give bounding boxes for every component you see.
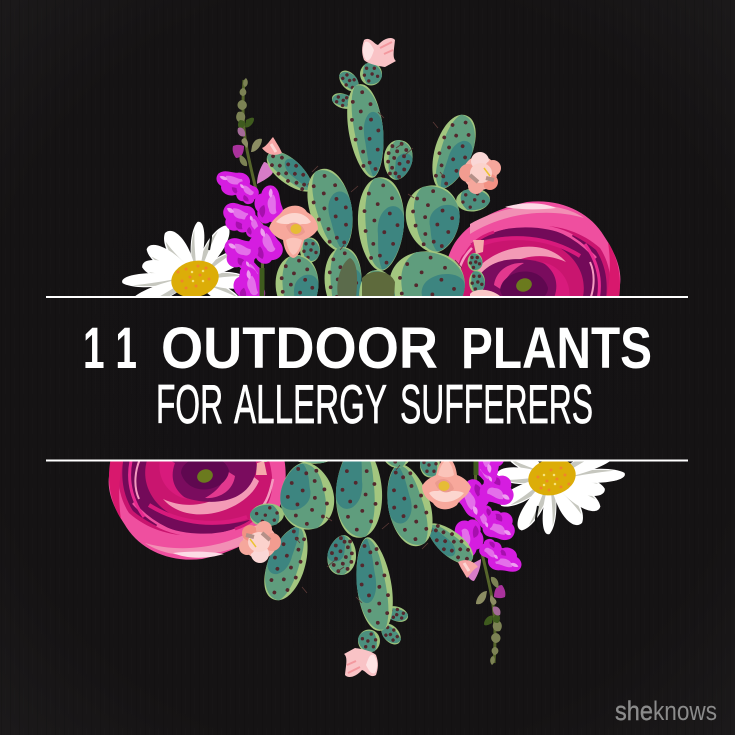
logo: sheknows: knows xyxy=(653,696,717,726)
title: main line: 1 1 xyxy=(83,316,137,381)
logo: sheknows xyxy=(615,696,717,726)
title: main line: OUTDOOR xyxy=(161,316,438,381)
bottom floral bouquet xyxy=(108,462,625,677)
daisy: bottom xyxy=(496,462,625,534)
title: sub line: ALLERGY xyxy=(234,373,387,435)
title band bottom rule xyxy=(46,460,688,462)
ranunculus: top xyxy=(448,201,620,296)
title: sub line: SUFFERERS xyxy=(400,373,593,435)
title: main line: PLANTS xyxy=(461,316,652,381)
snapdragon: top xyxy=(216,78,283,296)
cactus: bottom xyxy=(239,462,478,677)
title band top rule xyxy=(46,296,688,298)
title: sub line xyxy=(156,373,593,435)
logo: sheknows: she xyxy=(615,696,653,726)
snapdragon: bottom xyxy=(454,462,522,665)
top floral bouquet xyxy=(122,38,620,296)
ranunculus: bottom xyxy=(108,462,286,560)
daisy: top xyxy=(122,222,240,296)
cactus: top xyxy=(262,38,501,296)
title: sub line: FOR xyxy=(156,373,223,435)
title: main line xyxy=(83,316,652,381)
